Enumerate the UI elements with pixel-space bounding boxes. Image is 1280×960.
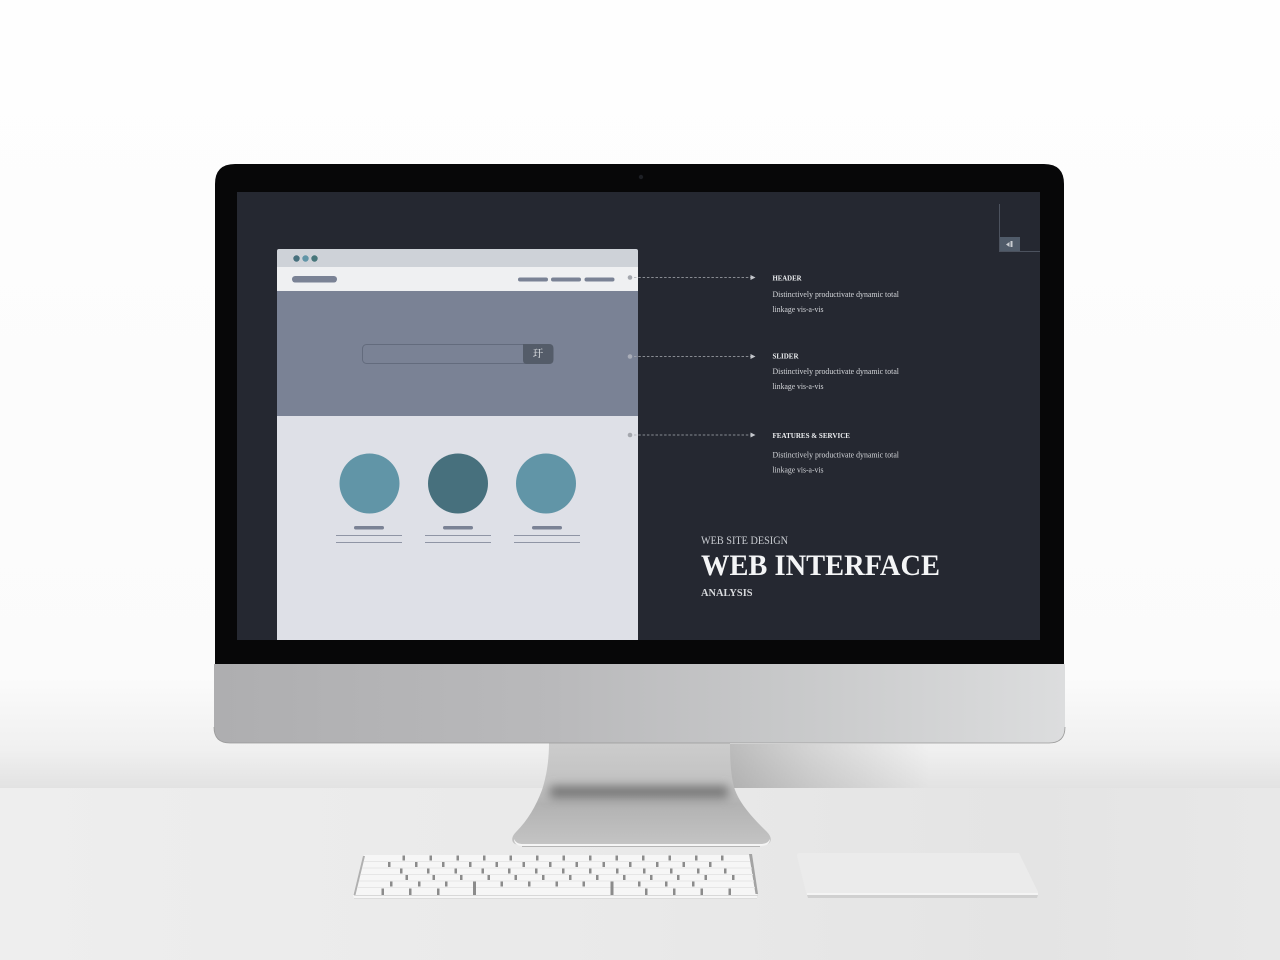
monitor stand (512, 743, 771, 847)
title (701, 535, 940, 599)
arrow: header (628, 275, 756, 280)
search box (362, 344, 554, 364)
corner decoration with icon (1000, 204, 1040, 252)
screen (237, 192, 1040, 640)
text block: slider: linkage vis-a-vis (772, 381, 824, 391)
monitor (214, 164, 1065, 743)
slider hero area (277, 291, 638, 416)
title: WEB INTERFACE (701, 549, 940, 582)
feature column 3 (514, 454, 580, 543)
key rows (358, 861, 755, 888)
text block: features and service: FEATURES & SERVICE (772, 431, 850, 440)
text block: features and service: Distinctively productivate dynamic total (772, 450, 900, 460)
webcam (639, 175, 643, 179)
monitor chin (214, 664, 1065, 743)
trackpad (797, 853, 1038, 898)
window dots (293, 255, 318, 262)
arrow: slider (628, 354, 756, 359)
text block: header: linkage vis-a-vis (772, 304, 824, 314)
title: WEB SITE DESIGN (701, 535, 789, 547)
text block: header: HEADER (772, 274, 802, 282)
title: ANALYSIS (701, 587, 752, 599)
website header bar (277, 267, 638, 291)
text block: features and service (772, 431, 900, 474)
feature column 2 (425, 454, 491, 543)
feature column 1 (336, 454, 402, 543)
text block: header: Distinctively productivate dynamic total (772, 289, 900, 299)
keyboard (353, 854, 758, 899)
text block: slider: Distinctively productivate dynamic total (772, 366, 900, 376)
browser wireframe panel (277, 249, 638, 640)
text block: slider: SLIDER (772, 352, 799, 360)
arrow: features and service (628, 432, 756, 438)
title bar (277, 249, 638, 267)
key gaps (382, 856, 734, 895)
text block: slider (772, 352, 900, 391)
icon: speaker (1006, 241, 1012, 247)
text block: header (772, 274, 900, 314)
features and service area (277, 416, 638, 640)
text block: features and service: linkage vis-a-vis (772, 464, 824, 474)
search box: 玗 (533, 348, 543, 360)
monitor bezel (215, 164, 1064, 664)
